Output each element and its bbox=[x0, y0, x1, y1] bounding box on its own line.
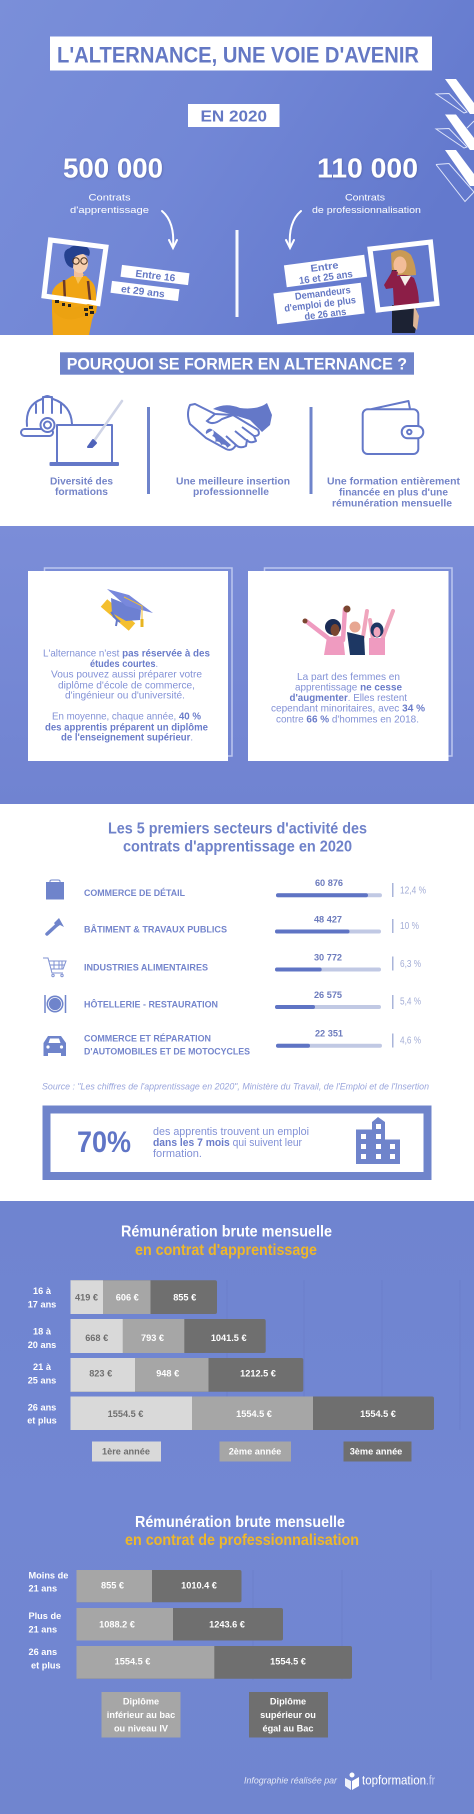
row: automobiles bbox=[44, 1029, 421, 1057]
icon: plate and cutlery bbox=[45, 995, 66, 1013]
text: women share bbox=[271, 672, 425, 725]
bar: plus de 21 ans: Plus de bbox=[28, 1611, 61, 1621]
text: higher education bbox=[43, 649, 210, 744]
callout: 70%: 70% bbox=[77, 1126, 131, 1159]
stat: apprenticeship contracts: Contrats bbox=[88, 193, 131, 204]
label: entre 16 bbox=[120, 265, 189, 286]
label: entre 16: Entre 16 bbox=[135, 269, 176, 284]
heading: professionalisation pay: en contrat de professionnalisation bbox=[125, 1532, 359, 1549]
heading: en 2020: EN 2020 bbox=[200, 108, 267, 126]
bar: moins de 21 ans: 855 € bbox=[101, 1581, 124, 1591]
icon: graduation cap and diploma bbox=[104, 589, 153, 627]
legend: diplomas: ou niveau IV bbox=[114, 1723, 169, 1733]
icon: shopping bag bbox=[46, 880, 64, 900]
text: formation financée bbox=[327, 476, 461, 509]
bar: 26 ans et plus: 26 ans bbox=[28, 1402, 56, 1412]
text: higher education: des apprentis préparent un diplôme bbox=[45, 722, 208, 733]
text: higher education: de l'enseignement supérieur. bbox=[61, 733, 193, 744]
text: women share: apprentissage ne cesse bbox=[295, 683, 402, 694]
row: hôtellerie bbox=[45, 990, 421, 1013]
text: meilleure insertion: professionnelle bbox=[193, 487, 269, 498]
bar: 26 ans et plus: 1554.5 € bbox=[236, 1409, 272, 1419]
label: entre 16 et 25 ans: 16 et 25 ans bbox=[298, 269, 354, 287]
row: hôtellerie: HÔTELLERIE - RESTAURATION bbox=[84, 998, 218, 1009]
text: meilleure insertion: Une meilleure insertion bbox=[176, 476, 290, 487]
text: higher education: diplôme d'école de commerce, bbox=[58, 680, 195, 691]
title: L'ALTERNANCE, UNE VOIE D'AVENIR bbox=[57, 42, 419, 67]
legend: diplomas bbox=[102, 1692, 328, 1738]
panel: card higher education bbox=[28, 568, 232, 761]
callout: 70% bbox=[46, 1110, 428, 1176]
divider bbox=[236, 230, 238, 317]
bar: plus de 21 ans: 1088.2 € bbox=[99, 1620, 135, 1630]
label: entre 16 et 25 ans: Entre bbox=[310, 260, 340, 275]
label: et 29 ans bbox=[110, 281, 179, 302]
row: industries alimentaires: INDUSTRIES ALIMENTAIRES bbox=[84, 963, 208, 973]
text: women share: La part des femmes en bbox=[297, 672, 400, 683]
panel: white sectors background bbox=[0, 804, 474, 1201]
bar: plus de 21 ans: 1243.6 € bbox=[209, 1620, 245, 1630]
panel: white reasons background bbox=[0, 335, 474, 526]
bar: 16 à 17 ans: 17 ans bbox=[28, 1300, 56, 1310]
bar: moins de 21 ans: Moins de bbox=[28, 1571, 68, 1581]
legend: years: 1ère année bbox=[102, 1446, 150, 1456]
bar: plus de 21 ans bbox=[28, 1608, 283, 1640]
panel: blue salary background bbox=[0, 1201, 474, 1814]
bar: 21 à 25 ans: 25 ans bbox=[28, 1375, 56, 1385]
stat: apprenticeship contracts: d'apprentissage bbox=[70, 205, 149, 216]
bar: 16 à 17 ans: 606 € bbox=[116, 1292, 139, 1302]
text: higher education: d'ingénieur ou d'université. bbox=[65, 691, 185, 702]
heading: professionalisation pay bbox=[125, 1514, 359, 1549]
row: industries alimentaires bbox=[43, 952, 421, 977]
title bbox=[50, 36, 432, 70]
bar: 18 à 20 ans: 668 € bbox=[85, 1333, 108, 1343]
stat: apprenticeship contracts bbox=[63, 153, 163, 216]
legend: diplomas: égal au Bac bbox=[262, 1723, 314, 1733]
text: formation financée: rémunération mensuelle bbox=[332, 498, 452, 509]
stat: professionalisation contracts: Contrats bbox=[345, 193, 385, 204]
callout: 70%: des apprentis trouvent un emploi bbox=[153, 1126, 309, 1138]
row: industries alimentaires: 6,3 % bbox=[400, 959, 421, 970]
bar: 26 ans et plus: 26 ans bbox=[28, 1647, 57, 1657]
row: bâtiment: 48 427 bbox=[314, 914, 342, 924]
text: diversité des formations bbox=[50, 476, 113, 498]
bar: 21 à 25 ans: 21 à bbox=[33, 1362, 52, 1372]
bar: 16 à 17 ans: 419 € bbox=[75, 1292, 98, 1302]
heading: apprenticeship pay: en contrat d'apprentissage bbox=[135, 1242, 317, 1259]
icon: building bbox=[356, 1117, 400, 1164]
bar: 21 à 25 ans: 948 € bbox=[156, 1369, 179, 1379]
row: commerce de détail: 12,4 % bbox=[400, 885, 426, 896]
heading: top 5 sectors: Les 5 premiers secteurs d'activité des bbox=[108, 820, 367, 837]
text: diversité des formations: formations bbox=[55, 487, 108, 498]
bar: 26 ans et plus: 1554.5 € bbox=[270, 1656, 306, 1666]
row: automobiles: 4,6 % bbox=[400, 1036, 421, 1047]
bar: 21 à 25 ans: 1212.5 € bbox=[240, 1369, 276, 1379]
icon: car bbox=[44, 1036, 66, 1056]
label: entre 16 et 25 ans bbox=[284, 255, 367, 289]
icon: shopping cart bbox=[43, 958, 66, 977]
text: formation financée: Une formation entièrement bbox=[327, 476, 461, 487]
stat: professionalisation contracts: 110 000 bbox=[317, 153, 418, 184]
bar: 16 à 17 ans bbox=[28, 1280, 217, 1314]
row: industries alimentaires: 30 772 bbox=[314, 952, 342, 962]
row: automobiles: D'AUTOMOBILES ET DE MOTOCYCLES bbox=[84, 1047, 250, 1057]
row: bâtiment: 10 % bbox=[400, 921, 419, 932]
stat: professionalisation contracts bbox=[312, 153, 421, 216]
text: diversité des formations: Diversité des bbox=[50, 476, 113, 487]
bar: 26 ans et plus: et plus bbox=[27, 1416, 57, 1426]
row: commerce de détail bbox=[46, 878, 426, 900]
arrow: right curved bbox=[286, 211, 301, 248]
bar: 26 ans et plus: 1554.5 € bbox=[360, 1409, 396, 1419]
chart: apprenticeship pay stacked bars bbox=[27, 1280, 460, 1430]
icon: handshake bbox=[188, 403, 272, 450]
text: women share: contre 66 % d'hommes en 2018. bbox=[276, 714, 419, 725]
bar: 18 à 20 ans: 20 ans bbox=[28, 1340, 56, 1350]
footer credit and logo: topformation bbox=[362, 1773, 426, 1787]
bar: 16 à 17 ans: 855 € bbox=[173, 1292, 196, 1302]
footer credit and logo: Infographie réalisée par bbox=[244, 1776, 338, 1787]
bar: 21 à 25 ans: 823 € bbox=[89, 1369, 112, 1379]
text: higher education: Vous pouvez aussi préparer votre bbox=[51, 670, 202, 681]
legend: diplomas: Diplôme bbox=[270, 1696, 306, 1706]
separator left bbox=[147, 407, 150, 494]
row: automobiles: 22 351 bbox=[315, 1029, 343, 1039]
row: commerce de détail: COMMERCE DE DÉTAIL bbox=[84, 887, 185, 898]
bar: 26 ans et plus bbox=[27, 1396, 434, 1430]
heading: apprenticeship pay bbox=[121, 1224, 332, 1259]
stat: professionalisation contracts: de professionnalisation bbox=[312, 205, 421, 216]
row: commerce de détail: 60 876 bbox=[315, 878, 343, 888]
panel: card women bbox=[248, 568, 452, 761]
bar: 18 à 20 ans: 18 à bbox=[33, 1326, 52, 1336]
icon: helmet laptop and brush bbox=[21, 396, 122, 465]
bar: 26 ans et plus: et plus bbox=[31, 1660, 61, 1670]
source note: Source : "Les chiffres de l'apprentissage en 2020", Ministère du Travail, de l'Emploi et de l'Insertion bbox=[42, 1082, 429, 1092]
arrow: left curved bbox=[162, 211, 177, 248]
text: women share: d'augmenter. Elles restent bbox=[290, 693, 407, 704]
row: automobiles: COMMERCE ET RÉPARATION bbox=[84, 1033, 211, 1044]
label: demandeurs d'emploi de plus de 26 ans: d'emploi de plus bbox=[284, 295, 357, 315]
legend: years: 3ème année bbox=[350, 1446, 402, 1456]
label: et 29 ans: et 29 ans bbox=[120, 284, 166, 300]
text: meilleure insertion bbox=[176, 476, 290, 498]
bar: 18 à 20 ans bbox=[28, 1319, 266, 1353]
panel: top background bbox=[0, 0, 474, 335]
icon: wallet bbox=[363, 401, 423, 454]
icon: three cheering women bbox=[302, 606, 393, 655]
bar: 18 à 20 ans: 1041.5 € bbox=[211, 1333, 247, 1343]
footer credit and logo bbox=[244, 1772, 435, 1790]
heading: en 2020 bbox=[188, 104, 280, 127]
legend: years: 2ème année bbox=[229, 1446, 281, 1456]
heading: top 5 sectors: contrats d'apprentissage en 2020 bbox=[123, 839, 352, 856]
bar: moins de 21 ans: 21 ans bbox=[28, 1584, 57, 1594]
icon: hammer bbox=[47, 918, 64, 934]
icon: topformation logo bbox=[345, 1772, 359, 1790]
text: higher education: En moyenne, chaque année, 40 % bbox=[52, 712, 201, 723]
text: higher education: L'alternance n'est pas réservée à des bbox=[43, 649, 210, 660]
chart: professionalisation pay stacked bars bbox=[28, 1570, 431, 1680]
separator right bbox=[310, 407, 312, 494]
legend: years bbox=[92, 1442, 412, 1462]
label: demandeurs d'emploi de plus de 26 ans: de 26 ans bbox=[304, 307, 347, 323]
callout: 70%: formation. bbox=[153, 1148, 202, 1160]
label: demandeurs d'emploi de plus de 26 ans bbox=[273, 283, 365, 326]
row: bâtiment bbox=[47, 914, 419, 934]
bar: 18 à 20 ans: 793 € bbox=[141, 1333, 164, 1343]
legend: diplomas: Diplôme bbox=[123, 1696, 159, 1706]
heading: professionalisation pay: Rémunération brute mensuelle bbox=[135, 1514, 345, 1531]
illustration: young man in frame bbox=[44, 240, 106, 335]
heading: pourquoi: POURQUOI SE FORMER EN ALTERNANCE ? bbox=[67, 354, 407, 373]
text: higher education: études courtes. bbox=[90, 659, 158, 670]
footer credit and logo: .fr bbox=[426, 1773, 435, 1787]
bar: 21 à 25 ans bbox=[28, 1358, 303, 1392]
label: demandeurs d'emploi de plus de 26 ans: Demandeurs bbox=[294, 285, 352, 303]
icon: decorative chevrons bbox=[436, 79, 474, 202]
callout: 70%: dans les 7 mois qui suivent leur bbox=[153, 1137, 302, 1149]
row: bâtiment: BÂTIMENT & TRAVAUX PUBLICS bbox=[84, 923, 227, 934]
stat: apprenticeship contracts: 500 000 bbox=[63, 153, 163, 184]
bar: 16 à 17 ans: 16 à bbox=[33, 1286, 52, 1296]
bar: 26 ans et plus bbox=[28, 1646, 352, 1679]
legend: diplomas: supérieur ou bbox=[260, 1710, 316, 1720]
heading: apprenticeship pay: Rémunération brute mensuelle bbox=[121, 1224, 332, 1241]
bar: 26 ans et plus: 1554.5 € bbox=[108, 1409, 143, 1419]
row: hôtellerie: 5,4 % bbox=[400, 997, 421, 1008]
heading: top 5 sectors bbox=[108, 820, 367, 856]
legend: diplomas: inférieur au bac bbox=[107, 1710, 175, 1720]
text: formation financée: financée en plus d'une bbox=[339, 487, 448, 498]
bar: moins de 21 ans: 1010.4 € bbox=[181, 1581, 217, 1591]
text: women share: cependant minoritaires, avec 34 % bbox=[271, 704, 425, 715]
bar: moins de 21 ans bbox=[28, 1570, 242, 1602]
bar: plus de 21 ans: 21 ans bbox=[28, 1624, 57, 1634]
bar: 26 ans et plus: 1554.5 € bbox=[115, 1656, 150, 1666]
row: hôtellerie: 26 575 bbox=[314, 990, 342, 1000]
panel: blue cards background bbox=[0, 526, 474, 804]
illustration: woman on phone in frame bbox=[370, 242, 437, 333]
